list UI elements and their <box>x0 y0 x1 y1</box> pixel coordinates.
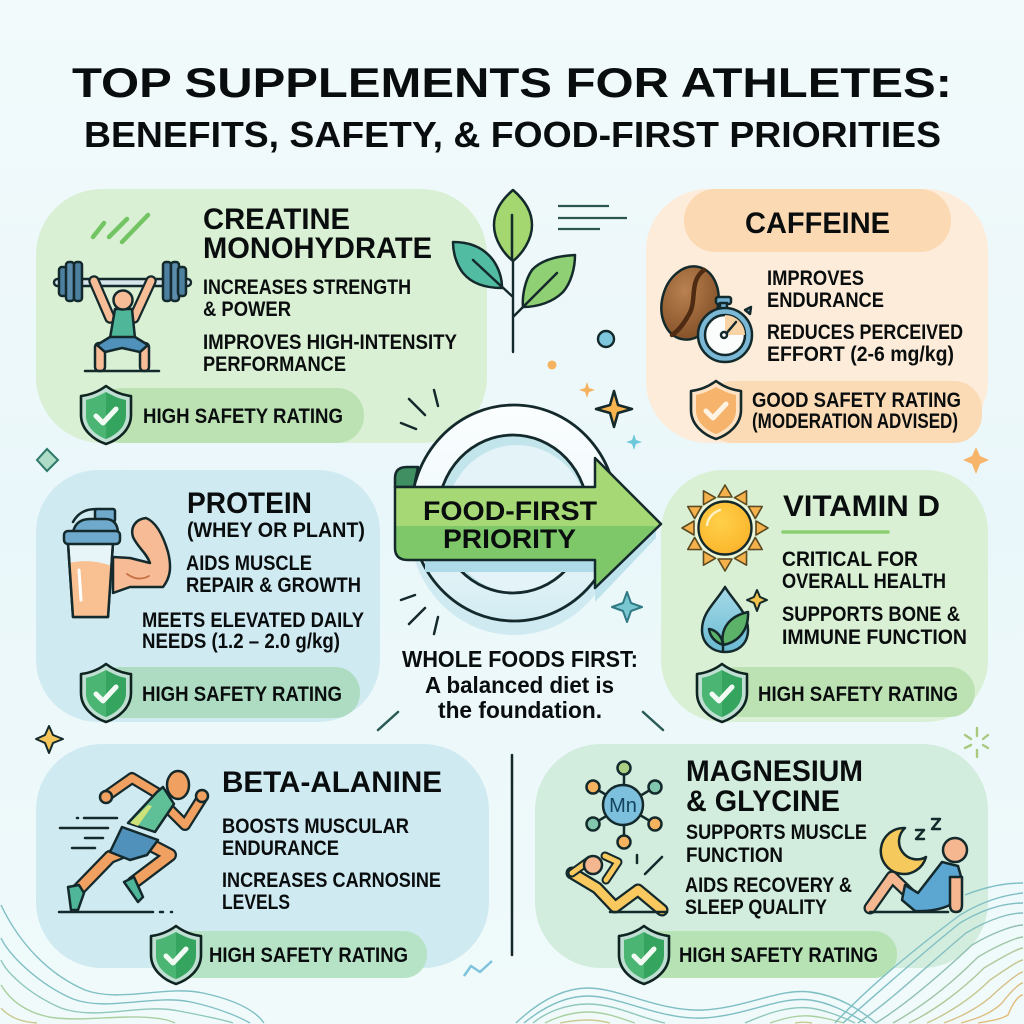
benefits: SUPPORTS BONE & <box>782 603 960 626</box>
benefits: MEETS ELEVATED DAILY <box>142 609 364 632</box>
benefits: INCREASES STRENGTH <box>203 276 411 299</box>
icon: shaker and bicep <box>64 509 170 617</box>
safety badge: GOOD SAFETY RATING <box>752 389 961 412</box>
benefits: BOOSTS MUSCULAR <box>222 815 409 838</box>
title: BENEFITS, SAFETY, & FOOD-FIRST PRIORITIES <box>84 114 941 155</box>
heading: VITAMIN D <box>783 490 940 523</box>
benefits: CRITICAL FOR <box>782 548 918 571</box>
safety badge <box>151 926 427 984</box>
icon: sun <box>682 485 768 571</box>
benefits <box>203 276 457 376</box>
caption: whole foods first: the foundation. <box>438 697 602 723</box>
heading: BETA-ALANINE <box>222 766 442 799</box>
safety badge: HIGH SAFETY RATING <box>143 405 343 428</box>
benefits: LEVELS <box>222 891 290 914</box>
safety badge: (MODERATION ADVISED) <box>752 410 958 433</box>
benefits: SLEEP QUALITY <box>685 896 827 919</box>
benefits: FUNCTION <box>686 844 783 867</box>
benefits <box>222 815 441 914</box>
benefits: AIDS RECOVERY & <box>685 874 852 897</box>
icon: coffee bean and stopwatch <box>654 260 752 362</box>
icon: molecule: Mn <box>609 795 637 817</box>
arrow: food-first priority <box>395 458 661 602</box>
benefits: ENDURANCE <box>222 837 339 860</box>
safety badge: HIGH SAFETY RATING <box>758 683 958 706</box>
panel: protein <box>36 470 380 722</box>
arrow label <box>423 496 598 554</box>
heading: (WHEY OR PLANT) <box>187 519 365 542</box>
icon: runner <box>59 771 208 912</box>
heading <box>187 487 365 542</box>
benefits: EFFORT (2-6 mg/kg) <box>767 343 954 366</box>
icon: water drop with leaf <box>702 587 767 652</box>
icon: sleeping person <box>870 819 967 912</box>
benefits: IMPROVES HIGH-INTENSITY <box>203 331 457 354</box>
arrow label: PRIORITY <box>443 524 576 554</box>
benefits: OVERALL HEALTH <box>782 570 946 593</box>
benefits: IMMUNE FUNCTION <box>782 626 967 649</box>
panel: beta-alanine <box>36 744 489 984</box>
heading: MAGNESIUM <box>686 755 863 788</box>
title <box>72 59 952 155</box>
heading <box>686 755 863 818</box>
benefits: ENDURANCE <box>767 289 884 312</box>
benefits: INCREASES CARNOSINE <box>222 869 441 892</box>
benefits <box>767 267 963 366</box>
panel: magnesium and glycine <box>535 744 988 984</box>
benefits: AIDS MUSCLE <box>186 552 312 575</box>
heading pill: CAFFEINE <box>745 207 890 240</box>
heading: & GLYCINE <box>686 785 840 818</box>
heading <box>203 203 432 265</box>
decorative dots and sparkles <box>36 331 989 976</box>
benefits <box>142 552 364 653</box>
benefits: IMPROVES <box>767 267 864 290</box>
icon: molecule <box>586 762 662 848</box>
panel: vitamin d <box>661 470 988 722</box>
icon: plant sprout <box>453 190 627 352</box>
wave decoration: bottom <box>1 883 1023 1023</box>
heading: PROTEIN <box>187 487 312 520</box>
safety badge <box>81 664 360 722</box>
caption: whole foods first: A balanced diet is <box>425 672 614 698</box>
safety badge: HIGH SAFETY RATING <box>679 944 878 967</box>
heading: MONOHYDRATE <box>203 232 432 265</box>
benefits <box>685 821 867 919</box>
caption: whole foods first <box>402 646 638 723</box>
caption: whole foods first: WHOLE FOODS FIRST: <box>402 646 638 672</box>
benefits: REDUCES PERCEIVED <box>767 321 963 344</box>
safety badge: HIGH SAFETY RATING <box>142 683 342 706</box>
safety badge: HIGH SAFETY RATING <box>209 944 408 967</box>
benefits: SUPPORTS MUSCLE <box>686 821 867 844</box>
heading pill <box>684 189 951 252</box>
icon: weightlifter <box>54 215 191 371</box>
benefits: REPAIR & GROWTH <box>186 574 361 597</box>
icon: resting person <box>572 855 667 912</box>
safety badge <box>81 386 364 444</box>
heading: CREATINE <box>203 203 350 236</box>
title: TOP SUPPLEMENTS FOR ATHLETES: <box>72 59 952 106</box>
panel: creatine <box>36 189 487 444</box>
safety badge <box>697 664 975 722</box>
panel: caffeine <box>646 189 988 443</box>
safety badge <box>619 926 897 984</box>
icon: plate with rays <box>401 390 619 635</box>
safety badge <box>691 381 982 443</box>
benefits: PERFORMANCE <box>203 353 346 376</box>
arrow label: FOOD-FIRST <box>423 496 598 526</box>
benefits: NEEDS (1.2 – 2.0 g/kg) <box>142 630 340 653</box>
benefits: & POWER <box>203 298 291 321</box>
benefits <box>782 548 967 649</box>
